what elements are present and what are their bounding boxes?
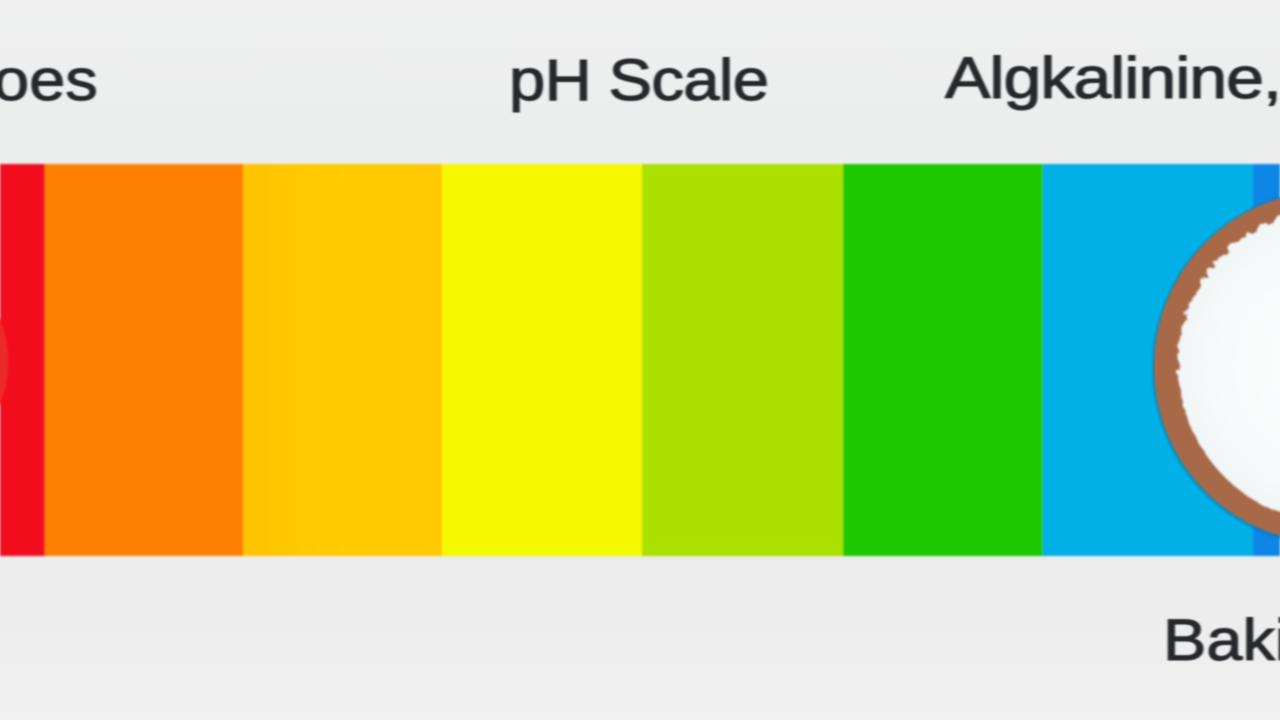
baking soda powder (1178, 207, 1280, 523)
chart group: colour segments (0, 164, 1280, 556)
segment: orange (45, 164, 243, 556)
segment: light blue (1043, 164, 1253, 556)
icon: red fruit edge (0, 302, 8, 422)
bowl rim (1154, 191, 1280, 543)
heading: Alkaline: Algkalinine, (945, 46, 1280, 111)
segment: blue (1253, 164, 1280, 556)
segment: red (0, 164, 45, 556)
icon: bowl of baking soda (1152, 190, 1280, 546)
heading: pH Scale: pH Scale (509, 48, 768, 113)
segment: amber (243, 164, 442, 556)
segment: lime (642, 164, 843, 556)
segment: green (843, 164, 1043, 556)
segment: yellow (442, 164, 642, 556)
bowl shadow (1152, 190, 1280, 546)
